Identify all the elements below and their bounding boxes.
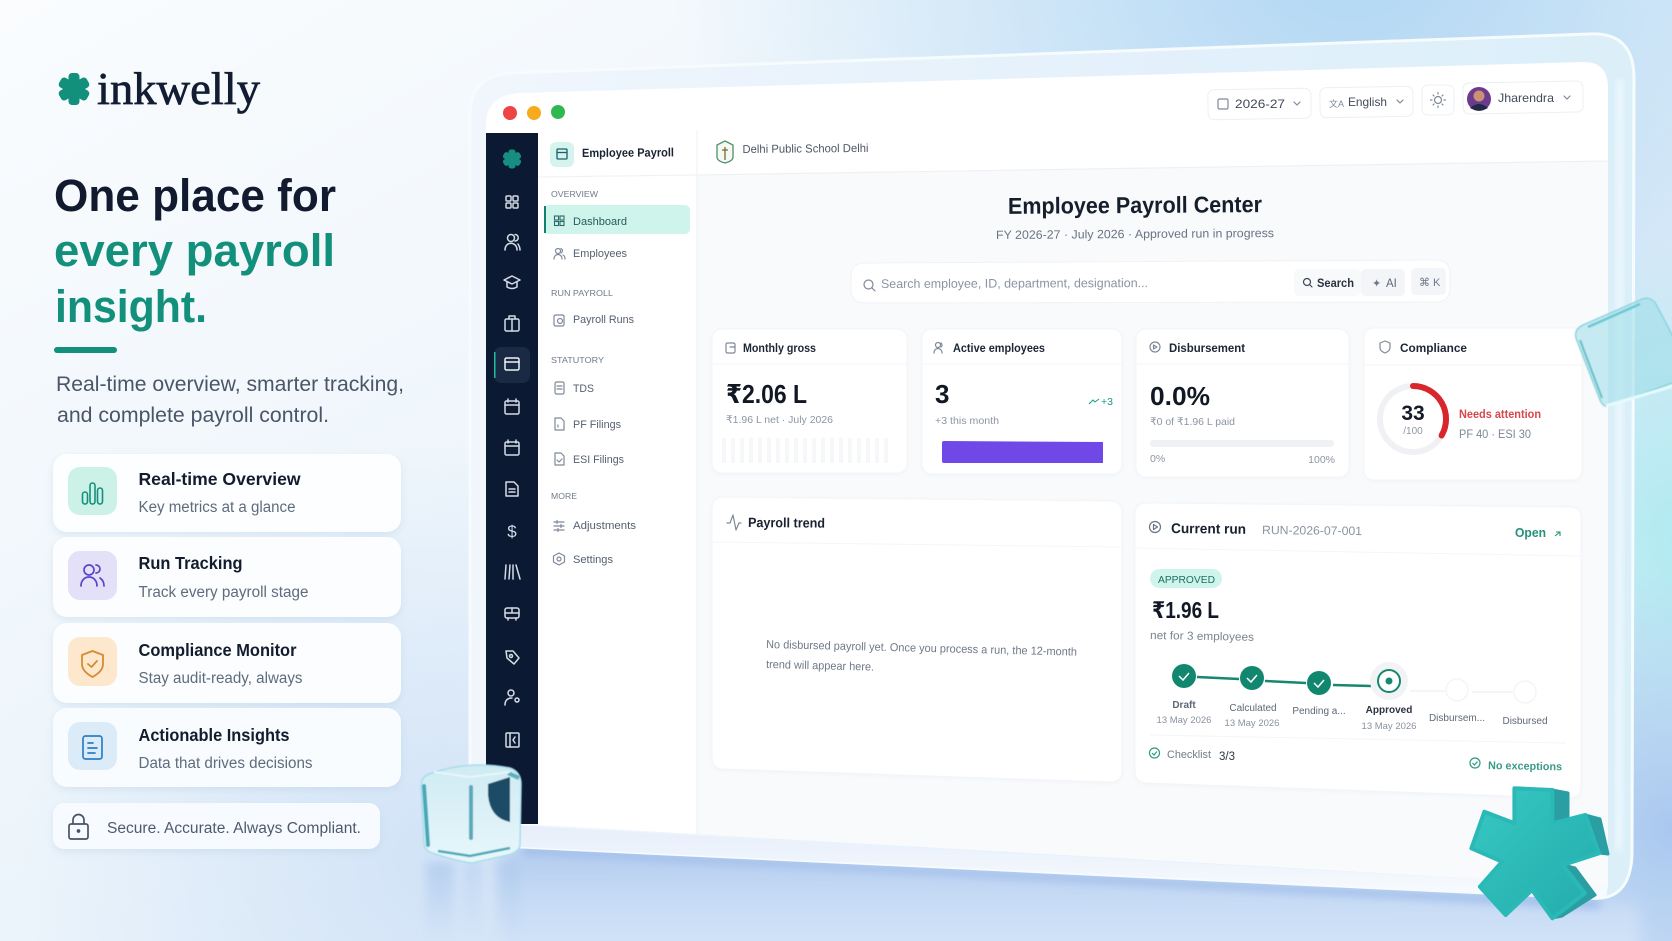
step: Calculated: 13 May 2026 xyxy=(1225,718,1279,729)
feature card: Real-time Overview: Key metrics at a glance xyxy=(138,499,296,516)
nav item: Payroll Runs: Payroll Runs xyxy=(573,314,634,326)
cube reflection xyxy=(426,862,519,941)
nav item: ESI Filings: ESI Filings xyxy=(573,454,624,466)
step: Draft: 13 May 2026 xyxy=(1157,715,1211,726)
year selector xyxy=(1208,88,1311,120)
window glass frame xyxy=(470,34,1634,898)
step: Disbursement xyxy=(1410,679,1485,724)
step: Approved xyxy=(1362,662,1416,732)
KPI card: Active employees: Active employees xyxy=(953,343,1045,355)
step: Calculated: Calculated xyxy=(1229,703,1277,714)
nav item: Settings xyxy=(554,553,613,566)
window surface xyxy=(486,62,1608,886)
feature card: Run Tracking xyxy=(53,537,401,617)
nav item: Settings: Settings xyxy=(573,554,613,566)
open link: Open xyxy=(1515,526,1546,540)
trend delta xyxy=(1089,396,1113,408)
icon: logo asterisk xyxy=(57,73,91,105)
icon: play circle xyxy=(1150,342,1160,352)
KPI card: Monthly gross xyxy=(712,329,907,473)
theme toggle xyxy=(1422,85,1454,115)
step: Disbursed xyxy=(1472,681,1548,727)
asterisk front face xyxy=(1471,788,1599,918)
empty state message: No disbursed payroll yet. Once you process a run, the 12-month xyxy=(766,639,1077,659)
search button xyxy=(1294,269,1361,296)
rail logo xyxy=(502,150,522,168)
year selector: 2026-27 xyxy=(1235,97,1285,111)
icon: shield xyxy=(1380,341,1390,353)
under-frame shadow xyxy=(521,850,1600,904)
icon: bar chart xyxy=(68,467,117,515)
KPI card: Compliance: PF 40 · ESI 30 xyxy=(1459,429,1531,441)
frame right highlight xyxy=(1619,80,1620,850)
subheading: Real-time overview, smarter tracking, xyxy=(56,372,404,396)
KPI card: Disbursement: 0% xyxy=(1150,453,1165,465)
empty state message: trend will appear here. xyxy=(766,659,874,674)
logo: inkwelly: inkwelly xyxy=(97,63,260,114)
icon: play circle xyxy=(1150,522,1160,532)
keyboard shortcut: ⌘ K xyxy=(1419,277,1441,289)
checklist: Checklist xyxy=(1167,749,1211,761)
rail icon: document xyxy=(506,482,518,496)
traffic lights xyxy=(503,105,565,120)
KPI card: Disbursement: 100% xyxy=(1308,454,1335,466)
step: Disbursed: Disbursed xyxy=(1502,716,1548,727)
app window xyxy=(486,62,1608,886)
secondary sidebar xyxy=(544,142,690,566)
status pill xyxy=(1150,569,1222,588)
trend delta: +3 xyxy=(1101,396,1113,408)
nav item: PF Filings: PF Filings xyxy=(573,419,621,431)
panel: Current run: RUN-2026-07-001 xyxy=(1262,523,1362,538)
status pill: APPROVED xyxy=(1158,574,1215,586)
KPI card: Disbursement: 0.0% xyxy=(1150,381,1210,411)
sidebar header xyxy=(550,142,674,167)
KPI card: Compliance: Compliance xyxy=(1400,343,1467,355)
purple bar xyxy=(942,441,1103,463)
sparkline placeholder xyxy=(722,438,888,463)
KPI card: Monthly gross: ₹2.06 L xyxy=(726,379,807,409)
step: Approved: Approved xyxy=(1366,705,1412,716)
compliance gauge: 33 xyxy=(1401,402,1425,425)
security pill: Secure. Accurate. Always Compliant. xyxy=(107,820,361,837)
checklist xyxy=(1150,748,1235,763)
search bar xyxy=(851,260,1450,303)
no exceptions: No exceptions xyxy=(1488,760,1562,773)
KPI card: Disbursement: ₹0 of ₹1.96 L paid xyxy=(1150,416,1235,428)
main content background xyxy=(697,161,1608,886)
feature card: Real-time Overview xyxy=(53,454,401,532)
page subtitle: FY 2026-27 · July 2026 · Approved run in progress xyxy=(996,226,1274,242)
headline: insight. xyxy=(55,281,207,332)
feature card: Run Tracking: Track every payroll stage xyxy=(138,584,308,601)
security pill xyxy=(53,803,380,849)
KPI card: Disbursement: Disbursement xyxy=(1169,343,1245,355)
compliance gauge: /100 xyxy=(1403,426,1423,437)
section label: overview: OVERVIEW xyxy=(551,189,598,199)
rail icon: tag xyxy=(506,651,519,664)
cube body xyxy=(421,765,521,863)
rail icon: collapse xyxy=(506,733,519,747)
top controls xyxy=(1208,81,1583,120)
progress track xyxy=(1150,440,1334,447)
subheading xyxy=(56,372,404,427)
KPI card: Monthly gross: ₹1.96 L net · July 2026 xyxy=(726,414,833,426)
rail icon: graduation cap xyxy=(504,276,520,288)
nav item: Dashboard: Dashboard xyxy=(573,216,627,228)
headline underline xyxy=(54,347,117,353)
school header: Delhi Public School Delhi xyxy=(742,143,869,156)
KPI card: Active employees: 3 xyxy=(935,379,949,409)
AI button: ✦ xyxy=(1372,278,1381,290)
feature card: Real-time Overview: Real-time Overview xyxy=(138,469,301,489)
KPI card: Active employees: +3 this month xyxy=(935,415,999,427)
AI button xyxy=(1361,269,1405,296)
language selector: English xyxy=(1348,95,1387,109)
rail icon: calendar two xyxy=(505,440,519,455)
KPI card: Disbursement xyxy=(1136,329,1349,477)
nav item: TDS xyxy=(555,382,594,395)
nav item: ESI Filings xyxy=(555,453,624,466)
step: Pending approval xyxy=(1292,671,1346,717)
panel: Current run xyxy=(1135,503,1581,798)
glass cube: top right xyxy=(1576,298,1672,406)
stepper connectors xyxy=(1197,677,1371,686)
KPI card: Compliance: Needs attention xyxy=(1459,409,1541,421)
headline xyxy=(54,170,336,332)
empty state message xyxy=(766,639,1077,674)
feature card: Actionable Insights xyxy=(53,708,401,787)
icon: school emblem xyxy=(717,141,733,163)
feature card: Actionable Insights: Data that drives decisions xyxy=(138,755,313,772)
feature card: Actionable Insights: Actionable Insights xyxy=(138,725,290,745)
icon: people xyxy=(68,551,117,600)
search bar: Search employee, ID, department, designation... xyxy=(881,276,1148,291)
feature card: Run Tracking: Run Tracking xyxy=(138,553,242,573)
no exceptions xyxy=(1470,758,1562,773)
KPI card: Compliance xyxy=(1364,328,1582,480)
nav item: PF Filings xyxy=(555,418,621,431)
panel: Current run: Current run xyxy=(1171,520,1246,537)
page title: Employee Payroll Center xyxy=(1008,191,1262,219)
rail icon: briefcase xyxy=(505,316,519,331)
navigation rail xyxy=(486,133,538,824)
headline: every payroll xyxy=(54,225,335,276)
icon: pulse xyxy=(727,515,741,530)
frame bottom lip xyxy=(486,824,1608,898)
rail icon: people xyxy=(505,234,520,250)
panel: Current run: ₹1.96 L xyxy=(1152,597,1219,623)
3D asterisk xyxy=(1471,788,1608,918)
feature card: Compliance Monitor: Stay audit-ready, always xyxy=(138,670,303,687)
step: Draft: Draft xyxy=(1172,700,1196,711)
search button: Search xyxy=(1317,276,1354,290)
nav item: Adjustments: Adjustments xyxy=(573,520,637,532)
step: Disbursement: Disbursem... xyxy=(1429,713,1485,724)
KPI card: Monthly gross: Monthly gross xyxy=(743,343,816,355)
step: Draft xyxy=(1157,664,1211,726)
nav item: Dashboard xyxy=(544,205,690,234)
panel: Payroll trend: Payroll trend xyxy=(748,515,825,531)
feature card: Compliance Monitor xyxy=(53,623,401,703)
user menu xyxy=(1463,81,1583,114)
section label: run payroll: RUN PAYROLL xyxy=(551,288,613,298)
section label: statutory: STATUTORY xyxy=(551,355,604,365)
rail icon: bus xyxy=(505,608,519,620)
checklist: 3/3 xyxy=(1219,751,1235,763)
headline: One place for xyxy=(54,170,336,221)
nav item: TDS: TDS xyxy=(573,383,594,395)
icon: lock xyxy=(69,814,88,839)
glass cube: bottom left xyxy=(421,765,521,941)
KPI card: Active employees xyxy=(922,329,1122,474)
subheading: and complete payroll control. xyxy=(57,403,329,427)
compliance gauge xyxy=(1380,386,1446,452)
icon: document xyxy=(68,722,117,770)
icon: search xyxy=(864,280,875,291)
panel: Payroll trend xyxy=(712,497,1122,782)
rail icon: dashboard xyxy=(506,196,518,208)
step: Calculated xyxy=(1225,666,1279,729)
icon: wallet xyxy=(726,343,735,353)
keyboard shortcut xyxy=(1411,268,1446,295)
school header xyxy=(717,141,869,163)
nav item: Employees: Employees xyxy=(573,248,627,260)
AI button: AI xyxy=(1386,278,1397,290)
rail icon: calendar xyxy=(505,399,519,414)
active rail item xyxy=(494,347,530,383)
step: Approved: 13 May 2026 xyxy=(1362,721,1416,732)
user menu: Jharendra xyxy=(1498,91,1554,105)
panel: Current run: net for 3 employees xyxy=(1150,630,1254,644)
rail icon: user settings xyxy=(505,690,519,705)
asterisk side faces xyxy=(1552,790,1608,918)
icon: shield xyxy=(68,637,117,686)
language selector xyxy=(1320,86,1413,118)
language selector: 文A xyxy=(1329,98,1344,109)
stepper xyxy=(1157,662,1548,732)
icon: people xyxy=(934,342,942,353)
feature card: Compliance Monitor: Compliance Monitor xyxy=(138,640,297,660)
rail icon: dollar: $ xyxy=(507,522,517,541)
rail icon: payroll card xyxy=(505,358,519,370)
step: Pending approval: Pending a... xyxy=(1292,706,1346,717)
sidebar header: Employee Payroll xyxy=(582,145,674,160)
section label: more: MORE xyxy=(551,491,577,501)
rail icon: library xyxy=(505,565,520,579)
